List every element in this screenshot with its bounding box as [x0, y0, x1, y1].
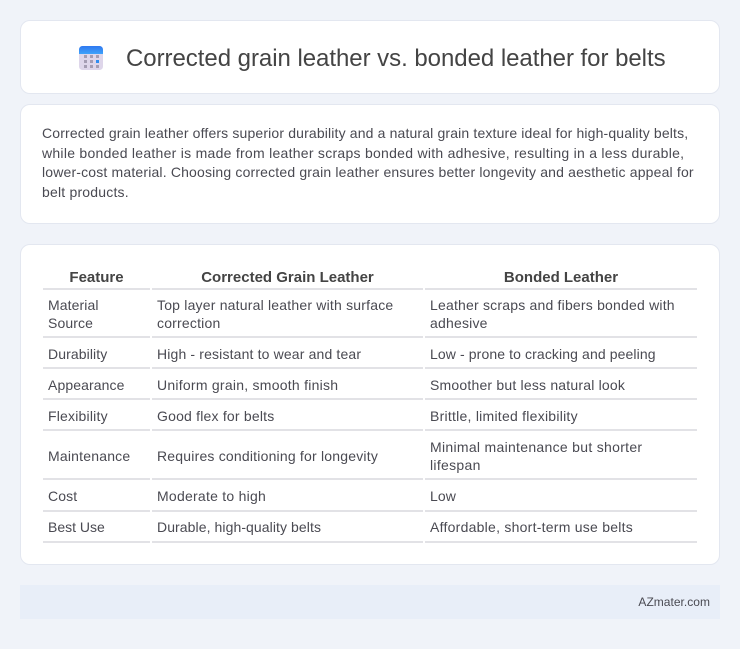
summary text — [42, 125, 694, 200]
panel: summary — [20, 104, 720, 224]
row: Material Source — [48, 297, 675, 331]
row: Appearance: Uniform grain, smooth finish — [157, 377, 338, 393]
row: Material Source: adhesive — [430, 315, 488, 331]
row: Material Source: Top layer natural leather with surface — [157, 297, 393, 313]
table header: Feature: Feature — [69, 269, 124, 286]
row: Material Source: Source — [48, 315, 93, 331]
row: Best Use: Durable, high-quality belts — [157, 519, 321, 535]
row: Durability — [48, 346, 656, 362]
row: Cost: Low — [430, 488, 456, 504]
footer text: AZmater.com — [638, 595, 710, 609]
row: Material Source: Leather scraps and fibers bonded with — [430, 297, 675, 313]
row: Flexibility: Brittle, limited flexibility — [430, 408, 578, 424]
table header: Bonded Leather: Bonded Leather — [504, 269, 618, 286]
row: Maintenance: lifespan — [430, 457, 481, 473]
row: Appearance: Appearance — [48, 377, 125, 393]
row: Material Source: correction — [157, 315, 220, 331]
row: Best Use: Best Use — [48, 519, 105, 535]
row: Maintenance — [48, 439, 642, 473]
row: Durability: Low - prone to cracking and peeling — [430, 346, 656, 362]
row: Flexibility: Good flex for belts — [157, 408, 274, 424]
row: Cost: Moderate to high — [157, 488, 266, 504]
row: Maintenance: Requires conditioning for longevity — [157, 448, 378, 464]
row: Material Source: Material — [48, 297, 99, 313]
row: Best Use — [48, 519, 633, 535]
row: Cost: Cost — [48, 488, 77, 504]
row: Maintenance: Maintenance — [48, 448, 130, 464]
summary text: lower-cost material. Choosing corrected grain leather ensures better longevity and aesthetic appeal for — [42, 164, 694, 180]
row: Flexibility — [48, 408, 578, 424]
table header: Corrected Grain Leather: Corrected Grain Leather — [201, 269, 374, 286]
footer bar — [20, 585, 720, 619]
row: Best Use: Affordable, short-term use belts — [430, 519, 633, 535]
title: Corrected grain leather vs. bonded leather for belts — [126, 45, 666, 72]
row: Durability: High - resistant to wear and tear — [157, 346, 361, 362]
panel: comparison table — [20, 244, 720, 565]
summary text: belt products. — [42, 184, 129, 200]
summary text: while bonded leather is made from leather scraps bonded with adhesive, resulting in a less durable, — [42, 145, 684, 161]
row: Cost — [48, 488, 456, 504]
row: Appearance: Smoother but less natural look — [430, 377, 625, 393]
icon: calendar — [79, 46, 103, 70]
header panel — [20, 20, 720, 94]
row: Flexibility: Flexibility — [48, 408, 108, 424]
row: Maintenance: Minimal maintenance but shorter — [430, 439, 642, 455]
summary text: Corrected grain leather offers superior durability and a natural grain texture ideal for high-quality belts, — [42, 125, 688, 141]
row: Appearance — [48, 377, 625, 393]
row: Durability: Durability — [48, 346, 107, 362]
